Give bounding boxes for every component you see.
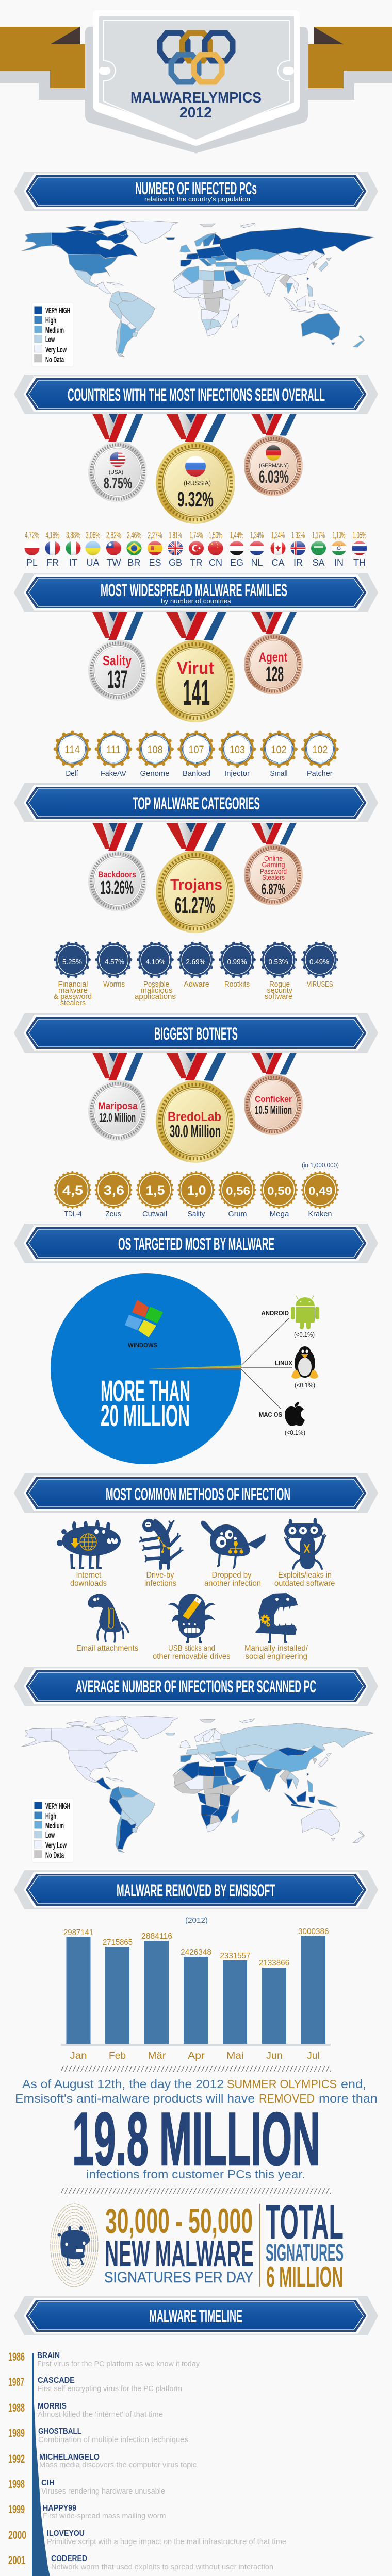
medal: Online gaming password stealers bronze: Gaming bbox=[262, 860, 285, 869]
country list: percentages: 1,81% bbox=[169, 530, 182, 540]
timeline area chart with arrow bbox=[32, 2353, 304, 2576]
botnet rosettes: 0,50 bbox=[267, 1184, 291, 1197]
bar chart: malware removed 2012: 2331557 bbox=[220, 1952, 251, 1960]
label: internet downloads: downloads bbox=[70, 1579, 107, 1588]
legend: infected PCs bbox=[32, 302, 74, 367]
medal: Virut gold: 141 bbox=[183, 672, 210, 713]
label: manually installed bbox=[244, 1644, 308, 1661]
timeline years: 2001 bbox=[8, 2554, 25, 2567]
botnet rosettes bbox=[55, 1162, 339, 1218]
country list: percentages: 1,34% bbox=[250, 530, 264, 540]
label: drive-by infections: infections bbox=[144, 1579, 176, 1588]
banner: infections per scanned PC bbox=[14, 1667, 378, 1705]
medal: Online gaming password stealers bronze: Stealers bbox=[262, 873, 285, 882]
timeline entry titles: CASCADE bbox=[38, 2376, 75, 2385]
timeline years: 1987 bbox=[8, 2376, 24, 2388]
label: manually installed: social engineering bbox=[246, 1652, 307, 1661]
label: android bbox=[261, 1310, 315, 1338]
medal: Online gaming password stealers bronze: 6.87% bbox=[262, 880, 285, 898]
legend: infected PCs: High bbox=[45, 316, 56, 325]
medal: USA silver: 8.75% bbox=[104, 474, 132, 492]
country list: codes: IT bbox=[69, 557, 77, 568]
country list: percentages: 1,32% bbox=[291, 530, 305, 540]
category rosettes: & password bbox=[54, 993, 92, 1001]
medal: Conficker bronze: 10.5 Million bbox=[255, 1104, 292, 1116]
monster: exploits and leaks bbox=[284, 1518, 326, 1569]
text: summer olympics statement: As of August 12th, the day the 2012 bbox=[22, 2077, 224, 2091]
medal: Sality silver: 137 bbox=[107, 666, 127, 693]
country list: percentages: 4,72% bbox=[25, 530, 39, 540]
label: usb sticks bbox=[153, 1644, 230, 1661]
botnet rosettes: 1,5 bbox=[145, 1183, 165, 1198]
legend: infected PCs: Low bbox=[45, 335, 55, 344]
category rosettes: stealers bbox=[60, 999, 86, 1007]
monster: email attachments bbox=[88, 1594, 128, 1642]
label: linux: (<0.1%) bbox=[295, 1382, 315, 1389]
family rosettes: 107 bbox=[189, 744, 204, 756]
icon: windows logo: WINDOWS bbox=[128, 1342, 157, 1349]
timeline entry descriptions: Mass media discovers the computer virus topic bbox=[39, 2461, 197, 2469]
timeline entry descriptions: First virus for the PC platform as we know it today bbox=[37, 2360, 200, 2368]
label: internet downloads bbox=[70, 1571, 107, 1588]
country list: percentages: 2,46% bbox=[127, 530, 141, 540]
banner: number of infected PCs: NUMBER OF INFECTED PCs bbox=[135, 179, 257, 198]
bar chart: malware removed 2012: Apr bbox=[188, 2050, 205, 2061]
legend: average infections: Medium bbox=[45, 1822, 64, 1831]
bar chart: malware removed 2012: 2987141 bbox=[63, 1928, 93, 1937]
title: 2012 bbox=[179, 105, 212, 121]
category rosettes: Financial bbox=[58, 980, 88, 989]
botnet rosettes: (in 1,000,000) bbox=[302, 1162, 339, 1169]
icon: fingerprint with monster bbox=[51, 2204, 98, 2287]
medal: Online gaming password stealers bronze bbox=[244, 823, 303, 905]
country list: percentages: 1,74% bbox=[190, 530, 203, 540]
bar chart: malware removed 2012: (2012) bbox=[185, 1916, 208, 1925]
family rosettes: Injector bbox=[224, 770, 250, 778]
label: android: (<0.1%) bbox=[294, 1331, 315, 1338]
country list: codes: NL bbox=[251, 557, 263, 568]
monster: usb sticks bbox=[168, 1594, 215, 1642]
category rosettes: applications bbox=[135, 993, 176, 1001]
category rosettes: security bbox=[267, 987, 293, 995]
medal: Online gaming password stealers bronze: Online bbox=[264, 854, 283, 862]
world map: average infections bbox=[21, 1716, 374, 1853]
country list: percentages: 1,50% bbox=[209, 530, 222, 540]
banner: malware families bbox=[14, 573, 378, 612]
botnet rosettes: Kraken bbox=[308, 1210, 332, 1218]
medal: Conficker bronze: Conficker bbox=[255, 1094, 292, 1104]
category rosettes: 0.53% bbox=[268, 958, 288, 967]
legend: average infections: Low bbox=[45, 1831, 55, 1840]
medal: BredoLab gold: 30.0 Million bbox=[170, 1122, 221, 1141]
timeline entry descriptions: Primitive script with a huge impact on the mail infrastructure of that time bbox=[47, 2537, 286, 2546]
bar chart: malware removed 2012 bbox=[61, 1916, 331, 2061]
family rosettes: 108 bbox=[148, 744, 163, 756]
medal: USA silver bbox=[88, 414, 147, 502]
timeline years: 1992 bbox=[8, 2452, 25, 2465]
banner: number of infected PCs bbox=[14, 172, 378, 210]
timeline years: 1988 bbox=[8, 2401, 25, 2414]
bar chart: malware removed 2012: 2884116 bbox=[141, 1932, 172, 1941]
medal: BredoLab gold bbox=[156, 1053, 235, 1163]
country list: codes: PL bbox=[26, 557, 38, 568]
timeline entry descriptions bbox=[37, 2360, 377, 2576]
medal: BredoLab gold: BredoLab bbox=[168, 1110, 221, 1124]
category rosettes: 0.49% bbox=[309, 958, 329, 967]
text: new malware signatures per day: 30,000 - 50,000 bbox=[105, 2201, 253, 2241]
banner: botnets: BIGGEST BOTNETS bbox=[154, 1024, 238, 1044]
label: dropped by another infection bbox=[204, 1571, 261, 1588]
label: usb sticks: USB sticks and bbox=[168, 1644, 215, 1653]
banner: OS targeted bbox=[14, 1224, 378, 1262]
timeline entry titles: BRAIN bbox=[37, 2351, 60, 2360]
text: summer olympics statement bbox=[15, 2077, 378, 2105]
family rosettes: Genome bbox=[140, 770, 169, 778]
category rosettes: software bbox=[265, 993, 292, 1001]
country list: percentages: 1,34% bbox=[271, 530, 285, 540]
medal: Germany bronze bbox=[244, 414, 303, 496]
label: mac os bbox=[259, 1411, 305, 1436]
family rosettes: 103 bbox=[230, 744, 245, 756]
timeline entry descriptions: First wide-spread mass mailing worm bbox=[43, 2512, 166, 2520]
family rosettes: 102 bbox=[271, 744, 287, 756]
category rosettes: Worms bbox=[103, 980, 125, 989]
country list: flags bbox=[24, 540, 367, 556]
country list: codes: BR bbox=[127, 557, 141, 568]
botnet rosettes: 4,5 bbox=[62, 1183, 83, 1198]
icon: android bbox=[291, 1296, 319, 1329]
medal: Conficker bronze bbox=[244, 1053, 303, 1135]
logo: olympic rings bbox=[160, 33, 233, 82]
category rosettes: Rogue bbox=[269, 980, 290, 989]
country list: percentages: 1,10% bbox=[332, 530, 346, 540]
text: summer olympics statement: REMOVED bbox=[259, 2092, 315, 2105]
label: mac os: MAC OS bbox=[259, 1411, 282, 1418]
family rosettes: 111 bbox=[106, 744, 121, 756]
category rosettes: VIRUSES bbox=[307, 980, 333, 989]
country list: percentages: 1,17% bbox=[312, 530, 325, 540]
label: dropped by another infection: Dropped by bbox=[211, 1571, 252, 1580]
timeline entry descriptions: Network worm that used exploits to spread without user interaction bbox=[51, 2563, 273, 2571]
label: linux bbox=[275, 1360, 315, 1389]
country list: codes: IR bbox=[293, 557, 303, 568]
medal: USA silver: (USA) bbox=[109, 469, 123, 476]
bar chart: malware removed 2012: Jan bbox=[70, 2050, 87, 2061]
timeline years: 1986 bbox=[8, 2350, 25, 2363]
medal: Agent bronze: Agent bbox=[259, 650, 288, 665]
country list: codes: UA bbox=[86, 557, 100, 568]
big number: more than 20 million bbox=[101, 1375, 190, 1433]
pie: windows share bbox=[51, 1273, 241, 1464]
label: usb sticks: other removable drives bbox=[153, 1652, 230, 1661]
category rosettes bbox=[54, 943, 337, 1007]
text: summer olympics statement: more than bbox=[319, 2092, 378, 2105]
header shield bbox=[85, 10, 308, 154]
text: summer olympics statement: SUMMER OLYMPICS bbox=[227, 2077, 337, 2091]
country list: percentages bbox=[25, 530, 366, 540]
timeline entry titles: HAPPY99 bbox=[43, 2504, 76, 2513]
bar chart: malware removed 2012: Mai bbox=[226, 2050, 243, 2061]
banner: botnets bbox=[14, 1014, 378, 1052]
timeline entry descriptions: First self encrypting virus for the PC platform bbox=[38, 2384, 182, 2393]
title bbox=[130, 90, 262, 121]
title: MALWARELYMPICS bbox=[130, 90, 262, 106]
timeline entry titles bbox=[37, 2351, 332, 2576]
botnet rosettes: Grum bbox=[228, 1210, 247, 1218]
label: exploits and leaks bbox=[274, 1571, 335, 1588]
medal: Mariposa silver bbox=[88, 1053, 147, 1141]
legend: average infections: No Data bbox=[45, 1851, 64, 1860]
botnet rosettes: Cutwail bbox=[142, 1210, 167, 1218]
text: summer olympics statement: end, bbox=[341, 2077, 366, 2091]
medal: Sality silver bbox=[88, 612, 147, 701]
legend: average infections: Very Low bbox=[45, 1841, 67, 1850]
botnet rosettes: Zeus bbox=[105, 1210, 121, 1218]
timeline entry descriptions: Combination of multiple infection techniques bbox=[38, 2435, 188, 2444]
family rosettes: Small bbox=[270, 770, 288, 778]
medal: Agent bronze bbox=[244, 612, 303, 694]
banner: malware removed bbox=[14, 1871, 378, 1909]
icon: apple bbox=[285, 1402, 305, 1426]
category rosettes: 4.10% bbox=[145, 958, 165, 967]
text: MORE THAN bbox=[101, 1375, 190, 1408]
monster: drive-by infections bbox=[140, 1519, 183, 1568]
country list: percentages: 2,82% bbox=[106, 530, 121, 540]
timeline entry titles: MICHELANGELO bbox=[39, 2453, 100, 2462]
family rosettes: 114 bbox=[64, 744, 80, 756]
medal: Trojans gold bbox=[156, 823, 235, 933]
medal: Mariposa silver: Mariposa bbox=[98, 1101, 138, 1112]
timeline entry titles: GHOSTBALL bbox=[38, 2427, 81, 2436]
category rosettes: 0.99% bbox=[227, 958, 247, 967]
label: exploits and leaks: outdated software bbox=[274, 1579, 335, 1588]
category rosettes: 2.69% bbox=[186, 958, 205, 967]
country list: codes: TR bbox=[190, 557, 202, 568]
label: manually installed: Manually installed/ bbox=[244, 1644, 308, 1653]
banner: number of infected PCs: relative to the country's population bbox=[144, 196, 250, 203]
category rosettes: 4.57% bbox=[105, 958, 124, 967]
botnet rosettes: 1,0 bbox=[187, 1183, 206, 1198]
botnet rosettes: 3,6 bbox=[104, 1183, 124, 1198]
label: email attachments: Email attachments bbox=[76, 1644, 138, 1653]
country list: percentages: 2,27% bbox=[148, 530, 162, 540]
icon: linux penguin bbox=[291, 1346, 318, 1379]
medal: Agent bronze: 128 bbox=[266, 662, 284, 686]
country list: codes: EG bbox=[230, 557, 243, 568]
divider bbox=[259, 2204, 260, 2287]
family rosettes bbox=[55, 732, 337, 778]
country list: percentages: 4,18% bbox=[45, 530, 60, 540]
medal: Germany bronze: (GERMANY) bbox=[259, 463, 289, 469]
world map: infected PCs bbox=[21, 220, 374, 357]
timeline entry descriptions: Viruses rendering hardware unusable bbox=[41, 2487, 165, 2496]
category rosettes: malware bbox=[58, 987, 88, 995]
medal: Germany bronze: 6.03% bbox=[259, 467, 289, 487]
label: exploits and leaks: Exploits/leaks in bbox=[278, 1571, 332, 1580]
timeline years: 2000 bbox=[8, 2529, 26, 2541]
category rosettes: Possible bbox=[143, 980, 169, 989]
banner: malware timeline bbox=[14, 2297, 378, 2335]
monster: manually installed bbox=[256, 1594, 297, 1642]
medal: Russia gold bbox=[156, 414, 235, 524]
country list: codes: TW bbox=[107, 557, 121, 568]
bar chart: malware removed 2012: Jul bbox=[307, 2050, 320, 2061]
medal: Mariposa silver: 12.0 Million bbox=[99, 1111, 136, 1124]
botnet rosettes: 0,56 bbox=[226, 1184, 250, 1197]
medal: Virut gold bbox=[156, 612, 235, 722]
timeline years bbox=[8, 2350, 27, 2576]
category rosettes: 5.25% bbox=[62, 958, 82, 967]
family rosettes: 102 bbox=[312, 744, 328, 756]
monster: dropped by another infection bbox=[201, 1521, 266, 1568]
timeline entry titles: ILOVEYOU bbox=[47, 2529, 85, 2538]
bar chart: malware removed 2012: Mär bbox=[148, 2050, 166, 2061]
legend: infected PCs: Very Low bbox=[45, 346, 67, 354]
country list: codes: CA bbox=[271, 557, 285, 568]
banner: categories bbox=[14, 784, 378, 822]
country list: percentages: 1,05% bbox=[353, 530, 366, 540]
country list: codes: IN bbox=[334, 557, 344, 568]
timeline years: 1989 bbox=[8, 2427, 25, 2439]
label: linux: LINUX bbox=[275, 1360, 293, 1367]
legend: average infections: VERY HIGH bbox=[45, 1802, 70, 1811]
text: new malware signatures per day: SIGNATURES PER DAY bbox=[104, 2269, 253, 2286]
timeline years: 1998 bbox=[8, 2478, 25, 2490]
legend: infected PCs: Medium bbox=[45, 326, 64, 335]
category rosettes: malicious bbox=[140, 987, 172, 995]
bar chart: malware removed 2012: Jun bbox=[266, 2050, 283, 2061]
medal: Sality silver: Sality bbox=[103, 653, 132, 668]
medal: Backdoors silver: Backdoors bbox=[98, 870, 136, 879]
banner: malware families: by number of countries bbox=[161, 598, 231, 605]
medal: Russia gold: (RUSSIA) bbox=[184, 480, 211, 487]
big number: more than 20 million: 20 MILLION bbox=[101, 1399, 190, 1433]
banner: categories: TOP MALWARE CATEGORIES bbox=[133, 794, 260, 814]
medal: Backdoors silver bbox=[88, 823, 147, 911]
text: total signatures 6 million bbox=[266, 2195, 344, 2294]
country list: codes: ES bbox=[149, 557, 161, 568]
label: drive-by infections bbox=[144, 1571, 176, 1588]
label: dropped by another infection: another infection bbox=[204, 1579, 261, 1588]
text: summer olympics statement: Emsisoft's anti-malware products will have bbox=[15, 2092, 255, 2105]
country list: codes: CN bbox=[209, 557, 222, 568]
medal: Online gaming password stealers bronze: Password bbox=[260, 867, 287, 875]
country list: codes: SA bbox=[312, 557, 325, 568]
timeline entry titles: MORRIS bbox=[38, 2402, 67, 2411]
botnet rosettes: Mega bbox=[269, 1210, 289, 1218]
botnet rosettes: TDL-4 bbox=[64, 1210, 81, 1218]
timeline entry descriptions: Almost killed the 'internet' of that time bbox=[38, 2410, 163, 2419]
label: drive-by infections: Drive-by bbox=[146, 1571, 174, 1580]
header ribbon bbox=[0, 27, 392, 100]
monster: internet downloads bbox=[57, 1520, 121, 1569]
country list: codes bbox=[26, 557, 366, 568]
country list: codes: TH bbox=[353, 557, 366, 568]
medal: Virut gold: Virut bbox=[177, 658, 214, 678]
family rosettes: Delf bbox=[66, 770, 78, 778]
country list: percentages: 3,06% bbox=[86, 530, 100, 540]
category rosettes: Rootkits bbox=[224, 980, 250, 989]
legend: infected PCs: No Data bbox=[45, 355, 64, 364]
banner: methods of infection bbox=[14, 1474, 378, 1512]
connector lines bbox=[241, 1318, 292, 1409]
icon: windows logo bbox=[125, 1300, 163, 1349]
text: new malware signatures per day bbox=[104, 2201, 254, 2286]
family rosettes: FakeAV bbox=[101, 770, 126, 778]
country list: codes: GB bbox=[169, 557, 182, 568]
medal: Backdoors silver: 13.26% bbox=[100, 877, 134, 898]
country list: percentages: 1,44% bbox=[230, 530, 243, 540]
legend: infected PCs: VERY HIGH bbox=[45, 307, 70, 315]
label: internet downloads: Internet bbox=[76, 1571, 101, 1580]
timeline years: 1999 bbox=[8, 2503, 25, 2516]
text: infections from customer PCs: infections from customer PCs this year. bbox=[86, 2167, 305, 2181]
category rosettes: Adware bbox=[184, 980, 209, 989]
botnet rosettes: Sality bbox=[188, 1210, 205, 1218]
country list: percentages: 3,88% bbox=[66, 530, 80, 540]
medal: Russia gold: 9.32% bbox=[177, 487, 214, 511]
timeline entry titles: CODERED bbox=[51, 2554, 87, 2563]
country list: codes: FR bbox=[46, 557, 59, 568]
bar chart: malware removed 2012: 2715865 bbox=[103, 1938, 133, 1947]
bar chart: malware removed 2012: 2426348 bbox=[181, 1948, 211, 1957]
label: android: ANDROID bbox=[261, 1310, 289, 1317]
medal: Trojans gold: 61.27% bbox=[175, 893, 215, 918]
bar chart: malware removed 2012: 2133866 bbox=[259, 1959, 289, 1968]
legend: average infections bbox=[32, 1798, 74, 1862]
legend: average infections: High bbox=[45, 1812, 56, 1821]
family rosettes: Banload bbox=[183, 770, 210, 778]
botnet rosettes: 0,49 bbox=[308, 1184, 333, 1197]
family rosettes: Patcher bbox=[307, 770, 333, 778]
bar chart: malware removed 2012: 3000386 bbox=[298, 1927, 329, 1936]
banner: countries bbox=[14, 375, 378, 413]
text: new malware signatures per day: NEW MALWARE bbox=[105, 2233, 254, 2275]
label: mac os: (<0.1%) bbox=[285, 1429, 305, 1436]
timeline entry titles: CIH bbox=[41, 2479, 55, 2487]
bar chart: malware removed 2012: Feb bbox=[109, 2050, 126, 2061]
banner: malware timeline: MALWARE TIMELINE bbox=[149, 2307, 242, 2326]
medal: Trojans gold: Trojans bbox=[170, 876, 222, 893]
